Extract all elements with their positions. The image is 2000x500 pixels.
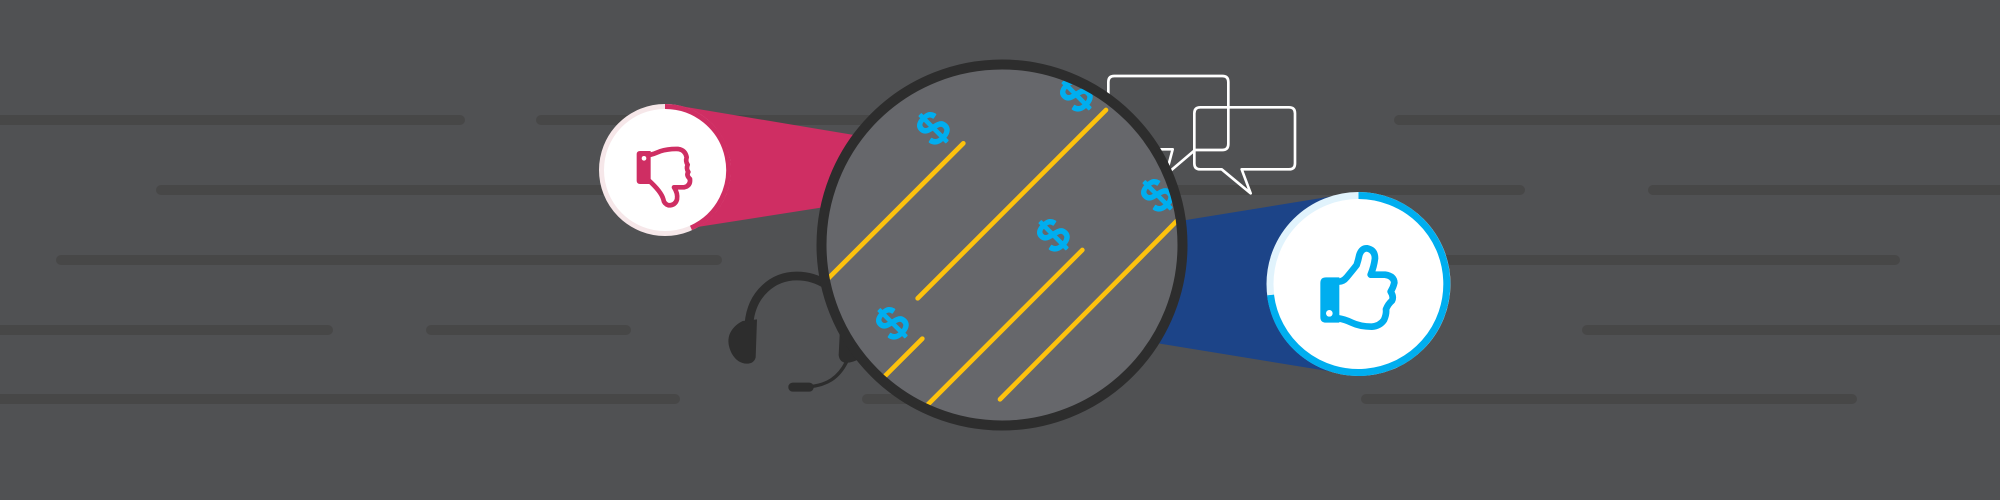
thumbs-down badge xyxy=(602,106,729,234)
dollar sign 4: $ xyxy=(1026,208,1080,262)
lens ring xyxy=(822,64,1182,426)
yellow lines and dollar signs xyxy=(829,80,1176,406)
dollar sign 3: $ xyxy=(1130,168,1184,222)
pink ring arc xyxy=(665,106,729,228)
icon: thumbs up xyxy=(1320,248,1394,327)
blue ring arc xyxy=(1270,196,1447,372)
magnifying glass xyxy=(820,64,1187,426)
speech bubble back xyxy=(1108,76,1228,175)
infographic canvas xyxy=(0,60,2000,430)
speech bubble front xyxy=(1194,107,1295,193)
pink wedge xyxy=(668,104,860,228)
icon: speech bubbles xyxy=(1108,76,1295,193)
lens background xyxy=(826,69,1178,421)
thumbs-up badge xyxy=(1270,196,1447,372)
dollar sign 1: $ xyxy=(906,101,960,155)
blue wedge xyxy=(1150,195,1340,373)
icon: headset xyxy=(728,276,870,392)
icon: thumbs down xyxy=(637,149,690,205)
dollar sign 2: $ xyxy=(1049,68,1103,122)
dollar sign 5: $ xyxy=(865,296,919,350)
